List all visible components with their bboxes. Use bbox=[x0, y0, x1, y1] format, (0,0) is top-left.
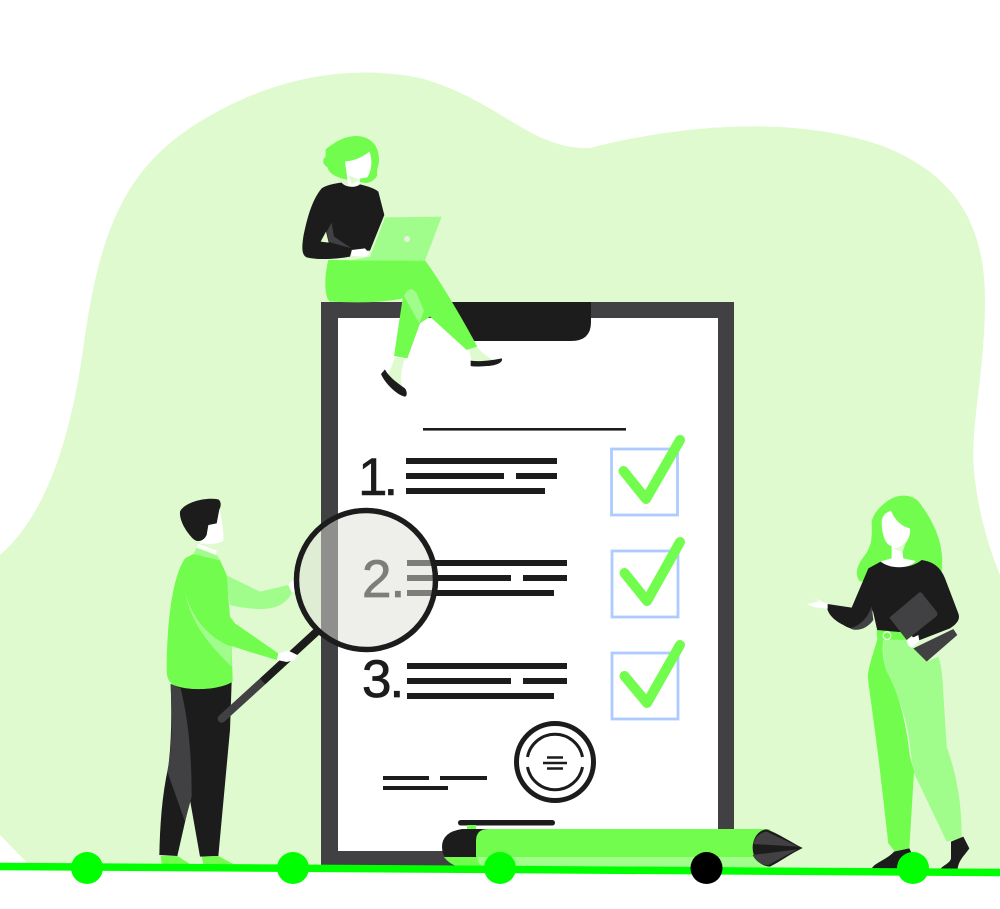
checkbox 3 bbox=[612, 645, 680, 719]
belt ring bbox=[883, 632, 891, 639]
front hand bbox=[277, 651, 297, 662]
arm gap bbox=[321, 232, 329, 243]
laptop logo bbox=[404, 236, 410, 242]
checkbox 2 bbox=[612, 542, 680, 617]
face bbox=[880, 511, 916, 568]
trousers bbox=[159, 682, 232, 857]
laptop bbox=[348, 217, 442, 261]
document title line bbox=[423, 428, 626, 431]
pen bbox=[442, 820, 803, 867]
knee highlight bbox=[404, 289, 424, 323]
folder bbox=[889, 592, 957, 662]
shoes bbox=[381, 358, 502, 397]
face bbox=[345, 152, 371, 187]
timeline dot 3 bbox=[484, 852, 516, 884]
man with magnifying glass bbox=[159, 499, 317, 864]
back arm bbox=[226, 575, 292, 609]
ground line bbox=[0, 866, 1000, 872]
hair bbox=[857, 496, 942, 582]
shoes bbox=[161, 856, 233, 864]
timeline dot 2 bbox=[277, 852, 309, 884]
shoes bbox=[872, 837, 969, 869]
trousers light leg bbox=[883, 639, 962, 842]
magnifying glass lens bbox=[296, 510, 436, 650]
hair bbox=[180, 499, 221, 541]
back hand bbox=[288, 576, 298, 593]
ankles bbox=[388, 347, 493, 388]
belt bbox=[877, 630, 907, 640]
sweater shade bbox=[327, 223, 352, 248]
neck shade bbox=[348, 175, 360, 184]
pen barrel bbox=[476, 829, 770, 867]
list item 1 bbox=[358, 448, 557, 507]
sleeve shade bbox=[850, 606, 873, 630]
trousers dark leg bbox=[868, 639, 914, 852]
hand bbox=[352, 248, 369, 257]
pen cap bbox=[442, 829, 490, 866]
list item 1: 1. bbox=[358, 448, 398, 507]
list item 3 bbox=[362, 650, 567, 709]
list item 2: 2. bbox=[362, 550, 405, 609]
pen clip bbox=[458, 820, 555, 826]
stamp seal bbox=[516, 724, 594, 800]
sweater bbox=[302, 183, 384, 259]
woman sitting with laptop bbox=[302, 136, 502, 397]
timeline dot 1 bbox=[71, 852, 103, 884]
legs bbox=[325, 260, 477, 358]
pen tip bbox=[753, 829, 803, 867]
clipboard bbox=[321, 302, 734, 866]
timeline dot 4 bbox=[690, 852, 722, 884]
collar bbox=[193, 548, 221, 561]
list item 3: 3. bbox=[362, 650, 404, 709]
neck shade bbox=[892, 540, 907, 552]
top bbox=[827, 560, 959, 641]
standing woman with folder bbox=[807, 496, 969, 869]
magnifier handle bbox=[222, 632, 317, 719]
clipboard clip bbox=[440, 302, 591, 341]
hair bbox=[323, 136, 379, 183]
trousers shade bbox=[167, 684, 192, 822]
sweater highlight bbox=[185, 592, 232, 667]
timeline dot 5 bbox=[897, 852, 929, 884]
checkbox 1 bbox=[612, 440, 680, 515]
list item 2 bbox=[362, 550, 567, 609]
hand with folder bbox=[907, 635, 919, 648]
sweater bbox=[167, 554, 278, 689]
open hand bbox=[807, 598, 828, 609]
signature lines bbox=[383, 776, 487, 790]
face bbox=[200, 509, 223, 544]
